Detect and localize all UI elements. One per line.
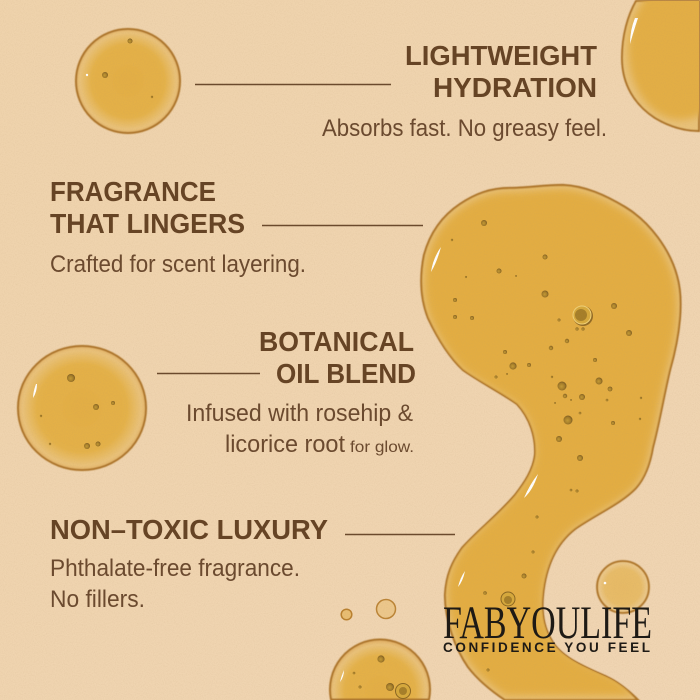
callout: lightweight hydration <box>195 40 607 142</box>
oil pool: large winding stream <box>421 185 681 700</box>
heading <box>405 40 597 103</box>
callout: non-toxic luxury <box>50 514 455 613</box>
body text: Infused with rosehip & <box>186 400 413 427</box>
bubble near logo <box>501 592 515 606</box>
heading: BOTANICAL <box>259 326 414 357</box>
callout: fragrance <box>50 176 423 278</box>
oil blob: top right corner <box>622 0 700 131</box>
body text: licorice root <box>225 431 345 458</box>
heading: LIGHTWEIGHT <box>405 40 597 71</box>
body text: Absorbs fast. No greasy feel. <box>322 115 607 142</box>
tiny droplet <box>341 609 352 620</box>
oil droplet: middle left <box>18 346 146 470</box>
leader line <box>157 372 260 374</box>
body text: No fillers. <box>50 586 145 613</box>
body text: Crafted for scent layering. <box>50 251 306 278</box>
leader line <box>262 224 423 226</box>
large bubble <box>573 306 593 326</box>
body text: for glow. <box>350 439 414 456</box>
leader line <box>345 534 455 536</box>
heading: HYDRATION <box>433 72 597 103</box>
small droplet right <box>597 561 649 613</box>
tiny droplet <box>376 600 396 618</box>
heading <box>259 326 416 389</box>
callout: botanical oil blend <box>157 326 416 458</box>
heading <box>50 176 245 239</box>
heading: OIL BLEND <box>276 358 416 389</box>
leader line <box>195 84 391 86</box>
heading: NON–TOXIC LUXURY <box>50 514 328 545</box>
heading: FRAGRANCE <box>50 176 216 207</box>
logo: CONFIDENCE YOU FEEL <box>443 640 650 655</box>
oil droplet: bottom <box>330 640 430 700</box>
bubbles in pool <box>451 220 642 672</box>
oil droplet: top left <box>76 29 180 133</box>
body text <box>186 400 414 458</box>
body text <box>50 555 300 613</box>
body text: Phthalate-free fragrance. <box>50 555 300 582</box>
heading: THAT LINGERS <box>50 208 245 239</box>
